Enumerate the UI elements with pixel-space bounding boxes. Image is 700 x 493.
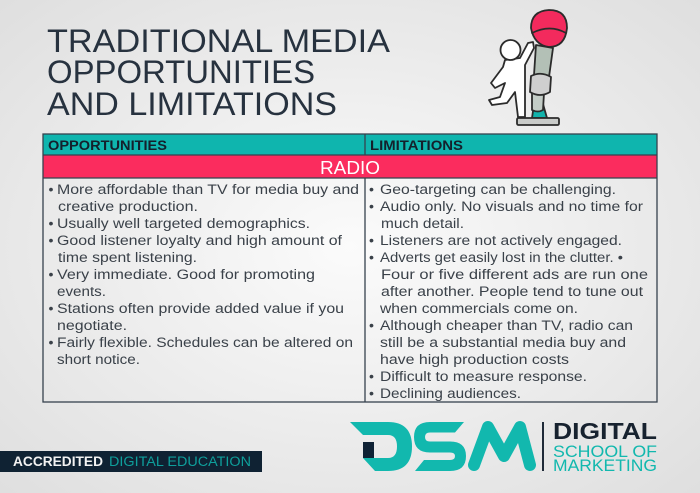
logo divider <box>542 422 544 471</box>
limitations list: Listeners are not actively engaged. <box>380 233 622 249</box>
logo letter D <box>350 422 412 471</box>
logo letter S <box>414 422 466 471</box>
opportunities list: Stations often provide added value if you <box>57 301 344 317</box>
limitations list: • <box>369 318 374 334</box>
opportunities list: time spent listening. <box>58 250 197 266</box>
microphone head <box>531 10 567 47</box>
opportunities list: • <box>48 267 54 283</box>
microphone stand <box>532 104 547 118</box>
logo letter M <box>474 427 530 465</box>
limitations list: Declining audiences. <box>380 386 521 402</box>
logo: DSM: SCHOOL OF <box>553 442 657 461</box>
limitations list: much detail. <box>381 216 464 232</box>
microphone body <box>534 45 553 77</box>
table: LIMITATIONS <box>370 138 463 153</box>
table: OPPORTUNITIES <box>48 138 167 153</box>
opportunities list: Good listener loyalty and high amount of <box>57 233 342 249</box>
opportunities list: negotiate. <box>57 318 127 334</box>
logo square <box>363 442 374 458</box>
table header <box>43 134 657 155</box>
opportunities list: Fairly flexible. Schedules can be altered on <box>57 335 353 351</box>
limitations list: • <box>369 369 374 385</box>
limitations list: have high production costs <box>380 352 569 368</box>
opportunities list: • <box>48 335 54 351</box>
opportunities list: creative production. <box>58 199 198 215</box>
limitations list: Adverts get easily lost in the clutter. • <box>380 250 623 266</box>
limitations list: still be a substantial media buy and <box>380 335 626 351</box>
opportunities list: • <box>48 233 54 249</box>
table borders <box>43 134 657 402</box>
limitations list: • <box>369 250 374 266</box>
limitations list: • <box>369 182 374 198</box>
limitations list: • <box>369 386 374 402</box>
limitations list: when commercials come on. <box>379 301 578 317</box>
limitations list: after another. People tend to tune out <box>381 284 643 300</box>
opportunities list: More affordable than TV for media buy and <box>57 182 359 198</box>
opportunities list: events. <box>57 284 106 300</box>
title: OPPORTUNITIES <box>47 54 315 90</box>
opportunities list: • <box>48 182 54 198</box>
logo: DSM: MARKETING <box>553 456 657 475</box>
logo wordmark: DIGITAL <box>553 418 657 444</box>
logo: DSM <box>350 418 657 475</box>
accreditation banner <box>0 451 262 472</box>
opportunities list: short notice. <box>57 352 140 368</box>
table: RADIO <box>320 157 380 178</box>
limitations list: Audio only. No visuals and no time for <box>380 199 643 215</box>
microphone collar <box>530 74 551 95</box>
title <box>47 23 391 122</box>
opportunities list: • <box>48 301 54 317</box>
microphone lower handle <box>532 93 544 112</box>
limitations list: Difficult to measure response. <box>380 369 587 385</box>
opportunities list <box>48 182 359 368</box>
limitations list: • <box>369 199 374 215</box>
limitations list: Four or five different ads are run one <box>381 267 648 283</box>
opportunities list: • <box>48 216 54 232</box>
title: TRADITIONAL MEDIA <box>47 23 391 59</box>
person head <box>500 40 520 60</box>
limitations list <box>369 182 648 402</box>
limitations list: Although cheaper than TV, radio can <box>380 318 633 334</box>
microphone base <box>517 118 559 125</box>
radio band <box>43 155 657 178</box>
limitations list: Geo-targeting can be challenging. <box>380 182 616 198</box>
icon: person holding giant microphone <box>489 10 567 125</box>
accreditation banner: DIGITAL EDUCATION <box>109 454 251 469</box>
limitations list: • <box>369 233 374 249</box>
opportunities list: Very immediate. Good for promoting <box>57 267 315 283</box>
title: AND LIMITATIONS <box>47 86 337 122</box>
person <box>489 42 534 117</box>
opportunities list: Usually well targeted demographics. <box>57 216 310 232</box>
table <box>43 134 657 402</box>
accreditation banner: ACCREDITED <box>13 454 103 469</box>
